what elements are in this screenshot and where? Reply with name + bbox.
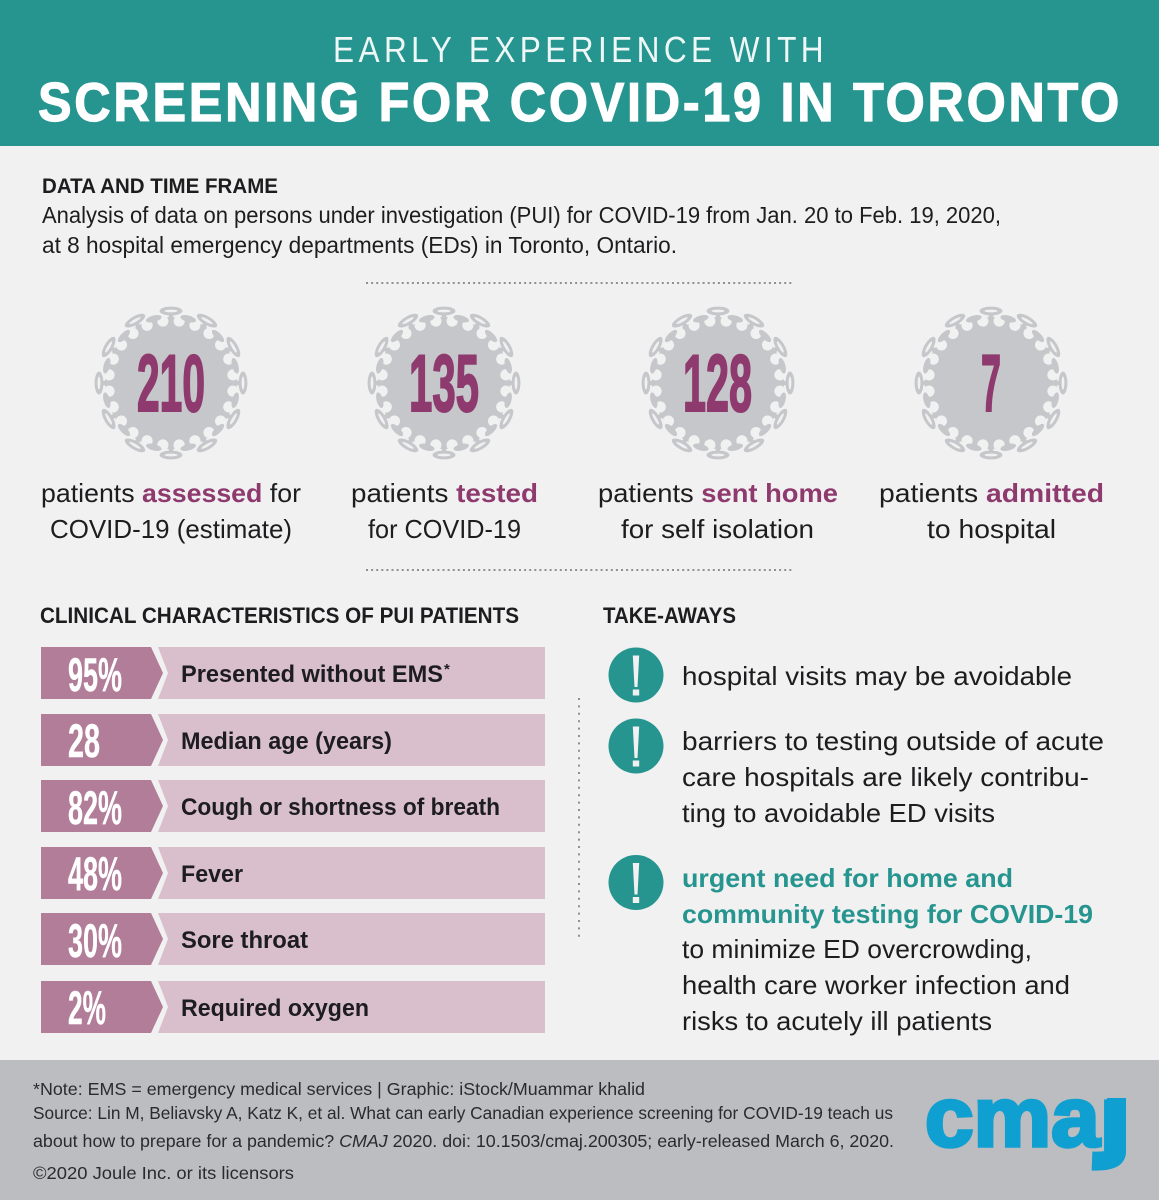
stat: 128 patients sent home: 128 [683,339,752,429]
clinical characteristics chart [41,647,545,1034]
take-away 1 [608,648,1072,702]
row: 48% fever: Fever [181,861,243,888]
stat: 135 patients tested: 135 [409,339,479,429]
row: 82% cough or shortness of breath: Cough or shortness of breath [181,794,500,821]
header banner [0,0,1159,146]
stat: 7 patients admitted: patients admitted [879,478,1104,508]
heading: clinical characteristics: CLINICAL CHARACTERISTICS OF PUI PATIENTS [40,603,519,628]
footer panel [0,1060,1159,1200]
row: 95% presented without EMS: * [444,661,450,678]
footer notes and source: about how to prepare for a pandemic? CMAJ 2020. doi: 10.1503/cmaj.200305; early-released March 6, 2020. [33,1131,894,1151]
header banner: EARLY EXPERIENCE WITH [333,29,828,70]
footer notes and source: *Note: EMS = emergency medical services | Graphic: iStock/Muammar khalid [33,1079,645,1099]
take-away 3: urgent need for home and [682,863,1013,893]
footer notes and source: ©2020 Joule Inc. or its licensors [33,1163,294,1183]
stat: 7 patients admitted: to hospital [927,514,1056,544]
row: 95% presented without EMS [41,647,545,701]
row: 82% cough or shortness of breath: 82% [68,781,122,834]
row: 30% sore throat [41,913,545,967]
row: 82% cough or shortness of breath [41,780,545,834]
stat: 135 patients tested [351,307,538,544]
row: 48% fever: 48% [68,847,122,900]
data and time frame text: DATA AND TIME FRAME [42,175,278,198]
stat: 135 patients tested: patients tested [351,478,538,508]
heading: take-aways: TAKE-AWAYS [603,603,736,628]
stat: 128 patients sent home: patients sent home [598,478,838,508]
cmaj logo [926,1098,1126,1171]
stat: 128 patients sent home [598,307,838,544]
take-away 1: hospital visits may be avoidable [682,661,1072,691]
row: 2% required oxygen [41,981,545,1034]
take-away 2 [608,718,1104,828]
stat: 7 patients admitted [879,307,1104,544]
cmaj logo: cmaj [925,1070,1124,1164]
take-away 3: health care worker infection and [682,970,1070,1000]
stat: 128 patients sent home: for self isolation [621,514,814,544]
take-away 2: care hospitals are likely contribu- [682,762,1089,792]
stat: 210 patients assessed: patients assessed for [41,478,301,508]
data and time frame text: Analysis of data on persons under investigation (PUI) for COVID-19 from Jan. 20 to Feb. 19, 2020, [42,202,1001,228]
row: 95% presented without EMS: 95% [68,648,122,701]
row: 95% presented without EMS: Presented without EMS [181,661,443,688]
row: 2% required oxygen: 2% [68,981,106,1034]
data and time frame text [42,175,1001,258]
row: 30% sore throat: Sore throat [181,927,308,954]
take-away 2: barriers to testing outside of acute [682,726,1104,756]
footer notes and source [33,1079,894,1183]
take-away 2: ting to avoidable ED visits [682,798,995,828]
stat: 7 patients admitted: 7 [981,339,1001,429]
stat: 210 patients assessed [41,307,301,544]
row: 30% sore throat: 30% [68,914,122,967]
row: 28 median age: Median age (years) [181,728,392,755]
footer notes and source: Source: Lin M, Beliavsky A, Katz K, et al. What can early Canadian experience screening for COVID-19 teach us [33,1103,893,1123]
take-away 3: risks to acutely ill patients [682,1006,992,1036]
data and time frame text: at 8 hospital emergency departments (EDs) in Toronto, Ontario. [42,232,677,258]
take-away 3: community testing for COVID-19 [682,899,1093,929]
stat: 135 patients tested: for COVID-19 [368,514,521,544]
stat: 210 patients assessed: 210 [137,339,205,429]
row: 48% fever [41,847,545,900]
row: 2% required oxygen: Required oxygen [181,995,369,1022]
take-away 3: to minimize ED overcrowding, [682,934,1032,964]
row: 28 median age [41,714,545,767]
row: 28 median age: 28 [68,714,100,767]
take-away 3 [608,855,1093,1036]
stat: 210 patients assessed: COVID-19 (estimate) [50,514,292,544]
